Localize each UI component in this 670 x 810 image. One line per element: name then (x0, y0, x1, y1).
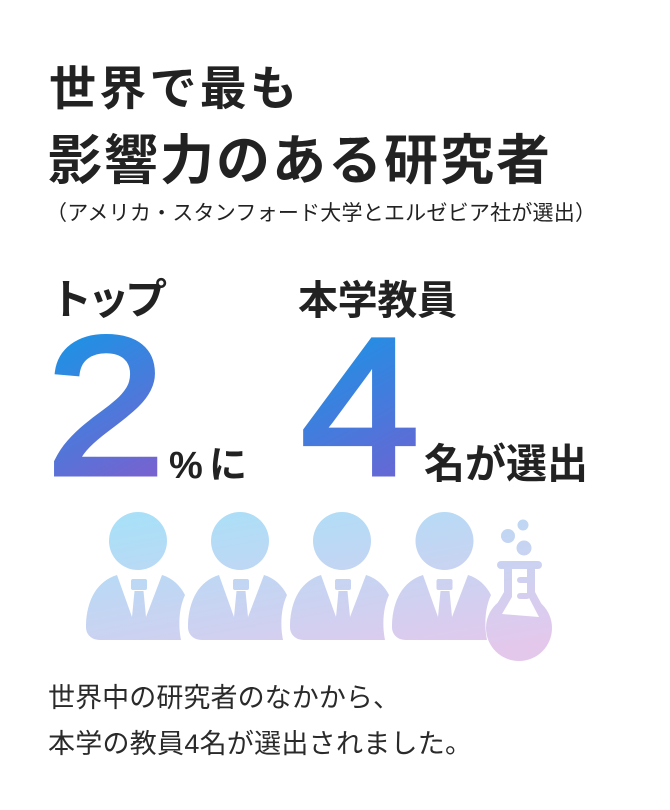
stat: 4 faculty members: 名が選出 (424, 441, 588, 487)
stat: 4 faculty members: 4 (301, 298, 419, 516)
subtitle: （アメリカ・スタンフォード大学とエルゼビア社が選出） (46, 202, 596, 225)
title (48, 62, 550, 191)
title: 世界で最も (49, 62, 297, 115)
stat: top 2 percent: トップ (50, 276, 167, 323)
body text (48, 683, 472, 759)
icons: researchers and flask (86, 512, 552, 661)
body text: 世界中の研究者のなかから、 (48, 683, 400, 713)
icon: person 4 (392, 512, 491, 640)
icon: person 2 (188, 512, 287, 640)
stat: top 2 percent (46, 276, 247, 516)
icon: person 3 (290, 512, 389, 640)
stat: 4 faculty members (298, 279, 588, 516)
title: 影響力のある研究者 (48, 131, 550, 191)
body text: 本学の教員4名が選出されました。 (48, 729, 472, 759)
stat: 4 faculty members: 本学教員 (298, 279, 457, 323)
stat: top 2 percent: 2 (46, 296, 165, 516)
stat: top 2 percent: %に (169, 445, 247, 487)
icon: flask (486, 520, 552, 661)
icon: person 1 (86, 512, 185, 640)
